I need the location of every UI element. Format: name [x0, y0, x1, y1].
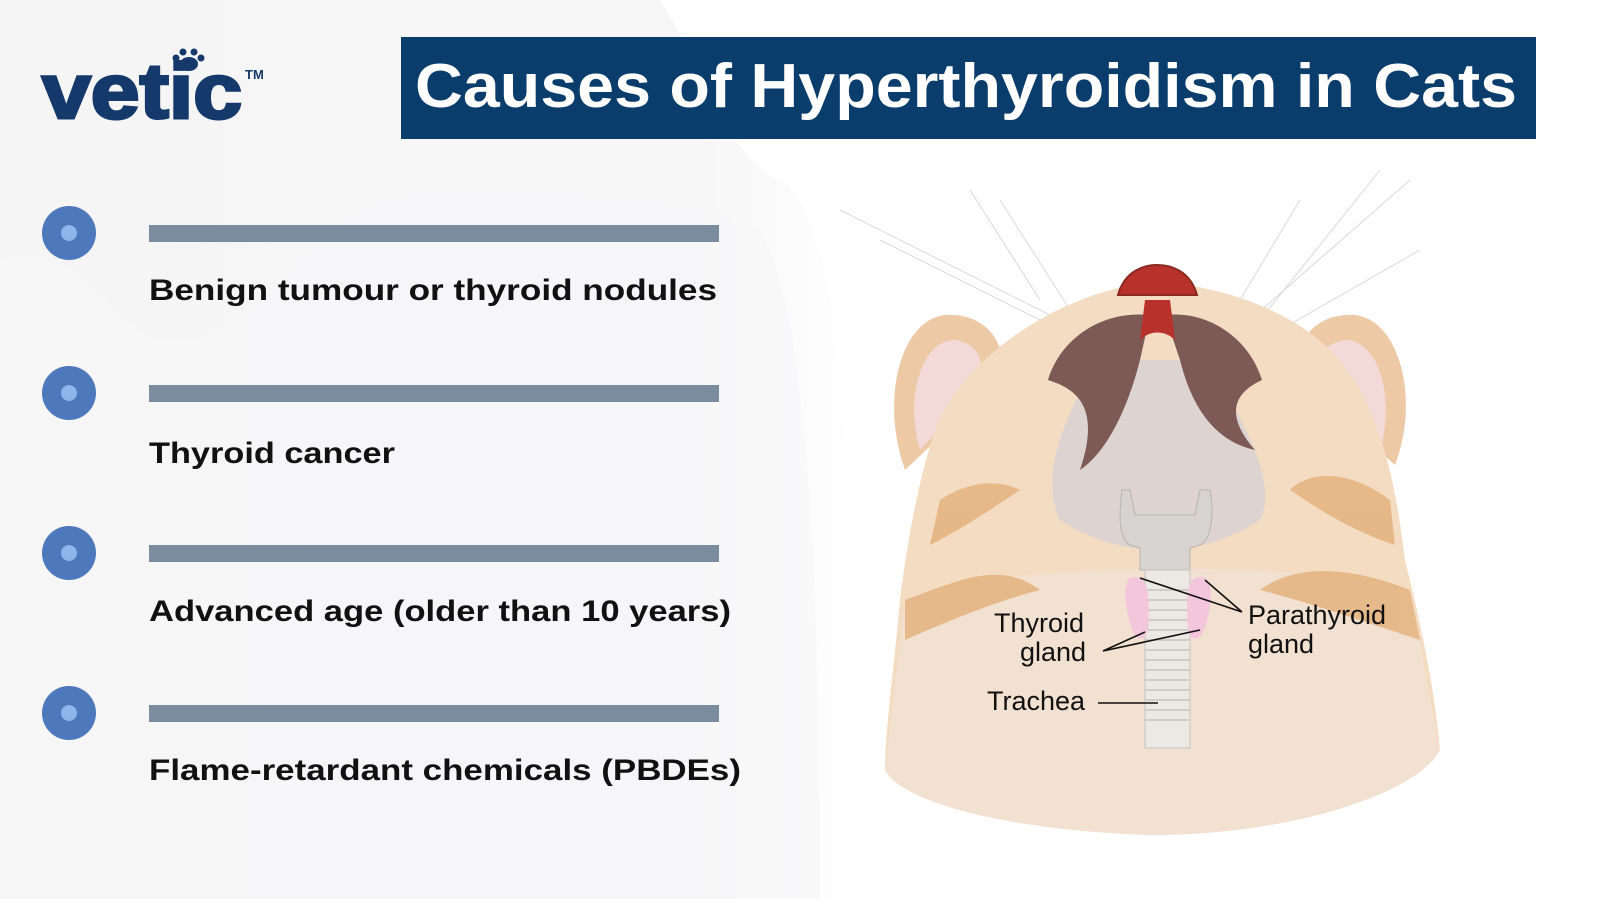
- whiskers: [840, 170, 1420, 330]
- thyroid lobes: [1125, 577, 1149, 639]
- logo: vetic: vetic: [42, 47, 242, 135]
- title banner: Causes of Hyperthyroidism in Cats: [415, 52, 1517, 121]
- larynx: [1120, 490, 1212, 570]
- list item 1: [42, 206, 719, 307]
- list item 4: [42, 686, 741, 787]
- labels & leader lines: [1098, 578, 1242, 703]
- chin grey: [1052, 360, 1265, 550]
- illustration: cat throat anatomy: Trachea: [987, 686, 1086, 716]
- logo: vetic: TM: [245, 67, 264, 82]
- list item 2: Thyroid cancer: [149, 437, 395, 470]
- illustration: cat throat anatomy: Thyroid: [994, 608, 1084, 638]
- list item 2: [42, 366, 719, 470]
- illustration: cat throat anatomy: [840, 170, 1440, 835]
- icon: paw: [172, 48, 204, 71]
- list item 3: [42, 526, 731, 628]
- list item 3: Advanced age (older than 10 years): [149, 595, 731, 628]
- list item 1: Benign tumour or thyroid nodules: [149, 274, 717, 307]
- mouth dark: [1048, 314, 1150, 470]
- list item 4: Flame-retardant chemicals (PBDEs): [149, 754, 741, 787]
- head: [885, 282, 1440, 835]
- illustration: cat throat anatomy: gland: [1248, 629, 1314, 659]
- title banner: [401, 37, 1536, 139]
- ears: [894, 315, 1003, 470]
- nose: [1118, 265, 1197, 295]
- stripes: [905, 476, 1420, 640]
- illustration: cat throat anatomy: gland: [1020, 637, 1086, 667]
- trachea: [1145, 570, 1190, 748]
- illustration: cat throat anatomy: Parathyroid: [1248, 600, 1386, 630]
